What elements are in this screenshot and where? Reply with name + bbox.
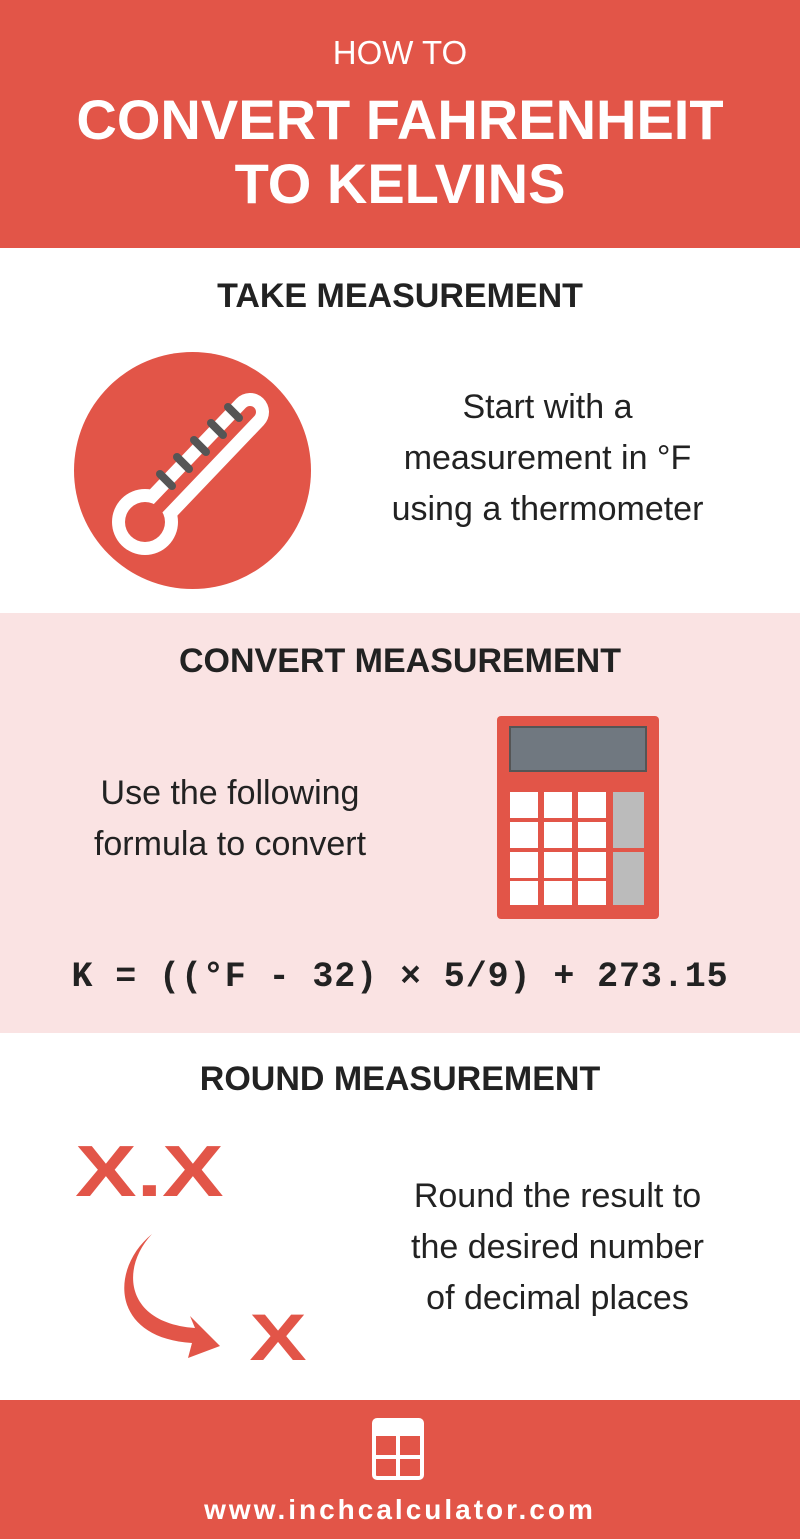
text block: the desired number <box>411 1228 704 1266</box>
text block: using a thermometer <box>392 490 703 528</box>
subtitle: HOW TO <box>333 34 467 71</box>
text block: measurement in °F <box>404 439 691 477</box>
section: round measurement <box>75 1060 704 1368</box>
heading: CONVERT MEASUREMENT <box>179 642 621 680</box>
text block <box>411 1177 704 1317</box>
icon: calculator <box>497 716 659 919</box>
footer <box>0 1400 800 1539</box>
text block: Use the following <box>101 774 359 812</box>
text block: Start with a <box>462 388 633 426</box>
url: www.inchcalculator.com <box>204 1494 596 1525</box>
section: convert measurement <box>0 613 800 1033</box>
icon: thermometer <box>74 352 311 589</box>
heading: TAKE MEASUREMENT <box>217 277 583 315</box>
formula: K = ((°F - 32) × 5/9) + 273.15 <box>71 957 729 997</box>
icon: calculator outline <box>372 1418 424 1480</box>
text block <box>392 388 703 528</box>
section: take measurement <box>74 277 703 589</box>
text block: formula to convert <box>94 825 366 863</box>
title: TO KELVINS <box>235 152 565 215</box>
text block <box>94 774 366 863</box>
text block: of decimal places <box>426 1279 689 1317</box>
text block: Round the result to <box>414 1177 701 1215</box>
header banner <box>0 0 800 248</box>
heading: ROUND MEASUREMENT <box>200 1060 600 1098</box>
title: CONVERT FAHRENHEIT <box>76 88 724 151</box>
title <box>76 88 724 215</box>
icon: rounding x.x to x <box>75 1138 307 1368</box>
